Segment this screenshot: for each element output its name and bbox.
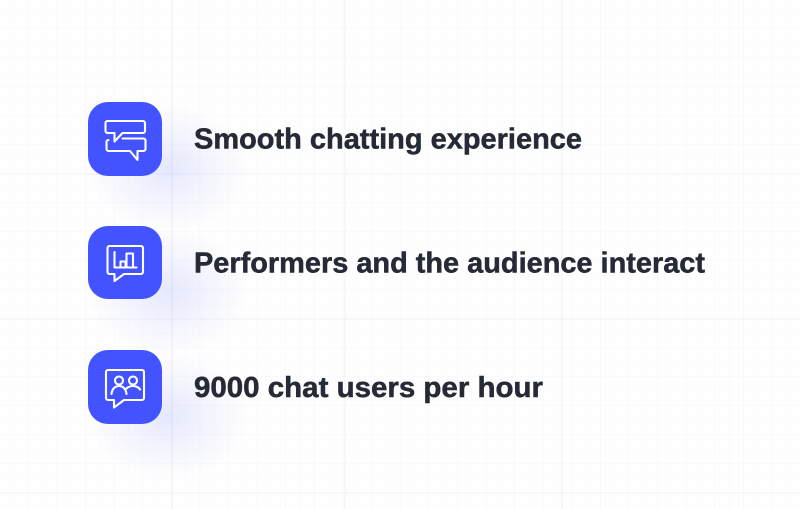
row: chat users <box>88 350 543 424</box>
icon: users bubble <box>88 350 162 424</box>
heading: chat users: 9000 chat users per hour <box>194 372 543 404</box>
glow: first icon <box>88 104 248 232</box>
row: smooth chatting <box>88 102 582 176</box>
icon: chat bubbles <box>88 102 162 176</box>
heading: performers: Performers and the audience interact <box>194 248 705 280</box>
glow: second icon <box>88 228 248 356</box>
icon: chart bubble <box>88 226 162 299</box>
heading: smooth chatting: Smooth chatting experience <box>194 124 582 156</box>
glow: third icon <box>88 352 248 480</box>
row: performers <box>88 226 705 299</box>
